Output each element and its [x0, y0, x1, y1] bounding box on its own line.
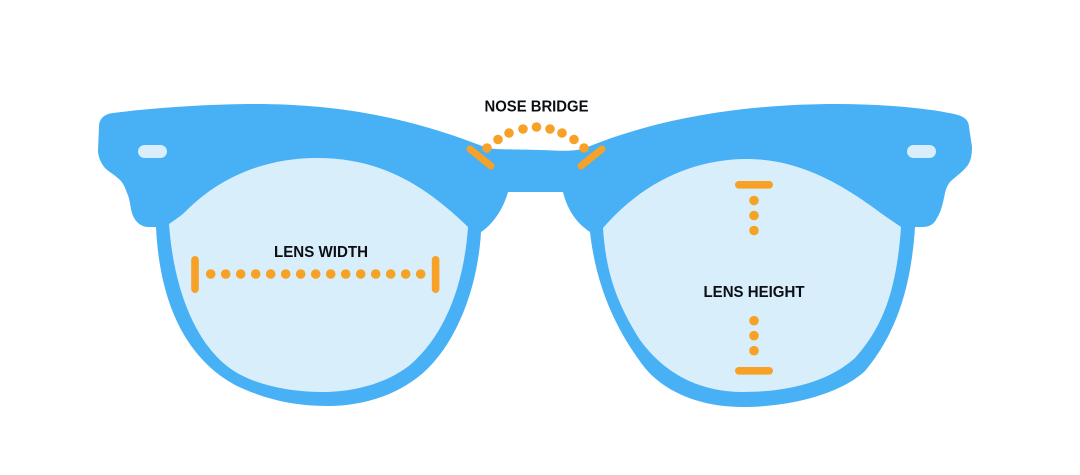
nose bridge label: NOSE BRIDGE	[484, 98, 589, 116]
lens height label: LENS HEIGHT	[704, 284, 805, 301]
lens width end bars	[191, 256, 439, 293]
lens width marker	[191, 256, 439, 293]
lens height top bar	[735, 181, 773, 189]
lens height top dots	[749, 196, 759, 235]
lens width label: LENS WIDTH	[274, 244, 368, 261]
lens height bottom bar	[735, 367, 773, 375]
lens height marker	[735, 181, 773, 375]
glasses frame	[98, 104, 972, 407]
nose bridge dotted arc	[482, 122, 589, 153]
left lens	[169, 158, 468, 392]
right lens	[603, 159, 901, 392]
lens height bottom dots	[749, 316, 759, 356]
nose bridge end bars	[470, 149, 602, 166]
nose bridge marker	[470, 122, 602, 166]
lens width dotted line	[206, 269, 426, 279]
right temple hinge slot	[907, 145, 936, 158]
left temple hinge slot	[138, 145, 167, 158]
